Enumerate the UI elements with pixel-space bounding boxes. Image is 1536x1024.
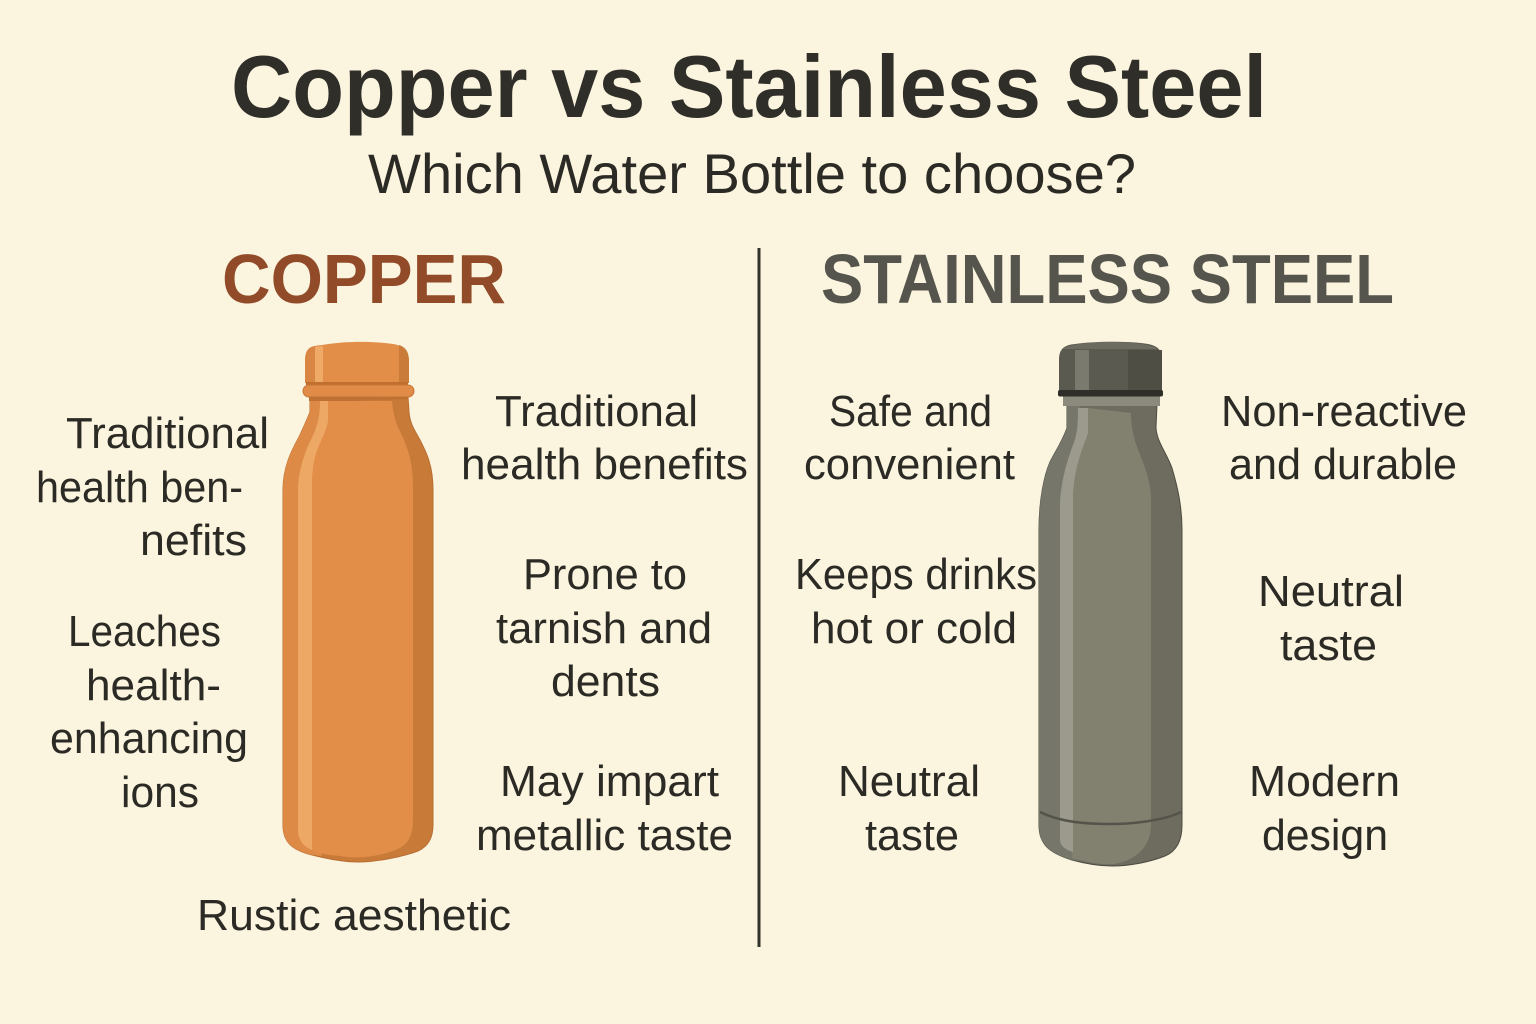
title: Copper vs Stainless Steel <box>231 37 1267 136</box>
text: safe and convenient: convenient <box>804 440 1015 489</box>
icon: copper bottle <box>283 342 433 862</box>
text: may impart metallic taste: May impart <box>500 757 719 806</box>
text: safe and convenient <box>804 387 1015 489</box>
text: neutral taste (right): taste <box>1280 621 1377 670</box>
text: prone to tarnish and dents <box>496 550 712 706</box>
subtitle: Which Water Bottle to choose? <box>368 142 1136 205</box>
text: rustic aesthetic: Rustic aesthetic <box>197 891 511 940</box>
text: traditional health benefits (right): health benefits <box>461 440 748 489</box>
text: neutral taste (right): Neutral <box>1258 567 1404 616</box>
heading: copper: COPPER <box>222 240 506 318</box>
panel: stainless steel <box>795 240 1467 866</box>
text: traditional health benefits (right) <box>461 387 748 489</box>
text: may impart metallic taste <box>476 757 733 860</box>
text: traditional health benefits (left) <box>36 409 269 565</box>
icon: steel bottle <box>1039 342 1182 866</box>
text: keeps drinks hot or cold: hot or cold <box>811 604 1017 653</box>
text: leaches health-enhancing ions: Leaches <box>68 607 221 656</box>
center divider <box>758 248 760 947</box>
text: leaches health-enhancing ions: enhancing <box>50 714 248 763</box>
text: prone to tarnish and dents: tarnish and <box>496 604 712 653</box>
text: traditional health benefits (left): health ben- <box>36 463 243 512</box>
text: keeps drinks hot or cold: Keeps drinks <box>795 550 1037 599</box>
text: prone to tarnish and dents: Prone to <box>523 550 687 599</box>
text: non-reactive and durable: Non-reactive <box>1221 387 1467 436</box>
text: non-reactive and durable <box>1221 387 1467 489</box>
heading: stainless steel: STAINLESS STEEL <box>821 240 1394 318</box>
text: neutral taste (right) <box>1258 567 1404 670</box>
text: modern design <box>1249 757 1400 860</box>
text: leaches health-enhancing ions: health- <box>86 661 221 710</box>
text: safe and convenient: Safe and <box>829 387 992 436</box>
text: traditional health benefits (left): nefits <box>140 516 247 565</box>
text: neutral taste (left): Neutral <box>838 757 980 806</box>
text: traditional health benefits (right): Traditional <box>495 387 698 436</box>
text: may impart metallic taste: metallic taste <box>476 811 733 860</box>
text: leaches health-enhancing ions: ions <box>121 768 199 817</box>
text: neutral taste (left) <box>838 757 980 860</box>
text: keeps drinks hot or cold <box>795 550 1037 653</box>
text: leaches health-enhancing ions <box>50 607 248 817</box>
text: modern design: design <box>1262 811 1388 860</box>
panel: copper <box>36 240 748 940</box>
text: neutral taste (left): taste <box>865 811 959 860</box>
text: non-reactive and durable: and durable <box>1229 440 1457 489</box>
text: traditional health benefits (left): Traditional <box>66 409 269 458</box>
text: modern design: Modern <box>1249 757 1400 806</box>
text: prone to tarnish and dents: dents <box>551 657 660 706</box>
